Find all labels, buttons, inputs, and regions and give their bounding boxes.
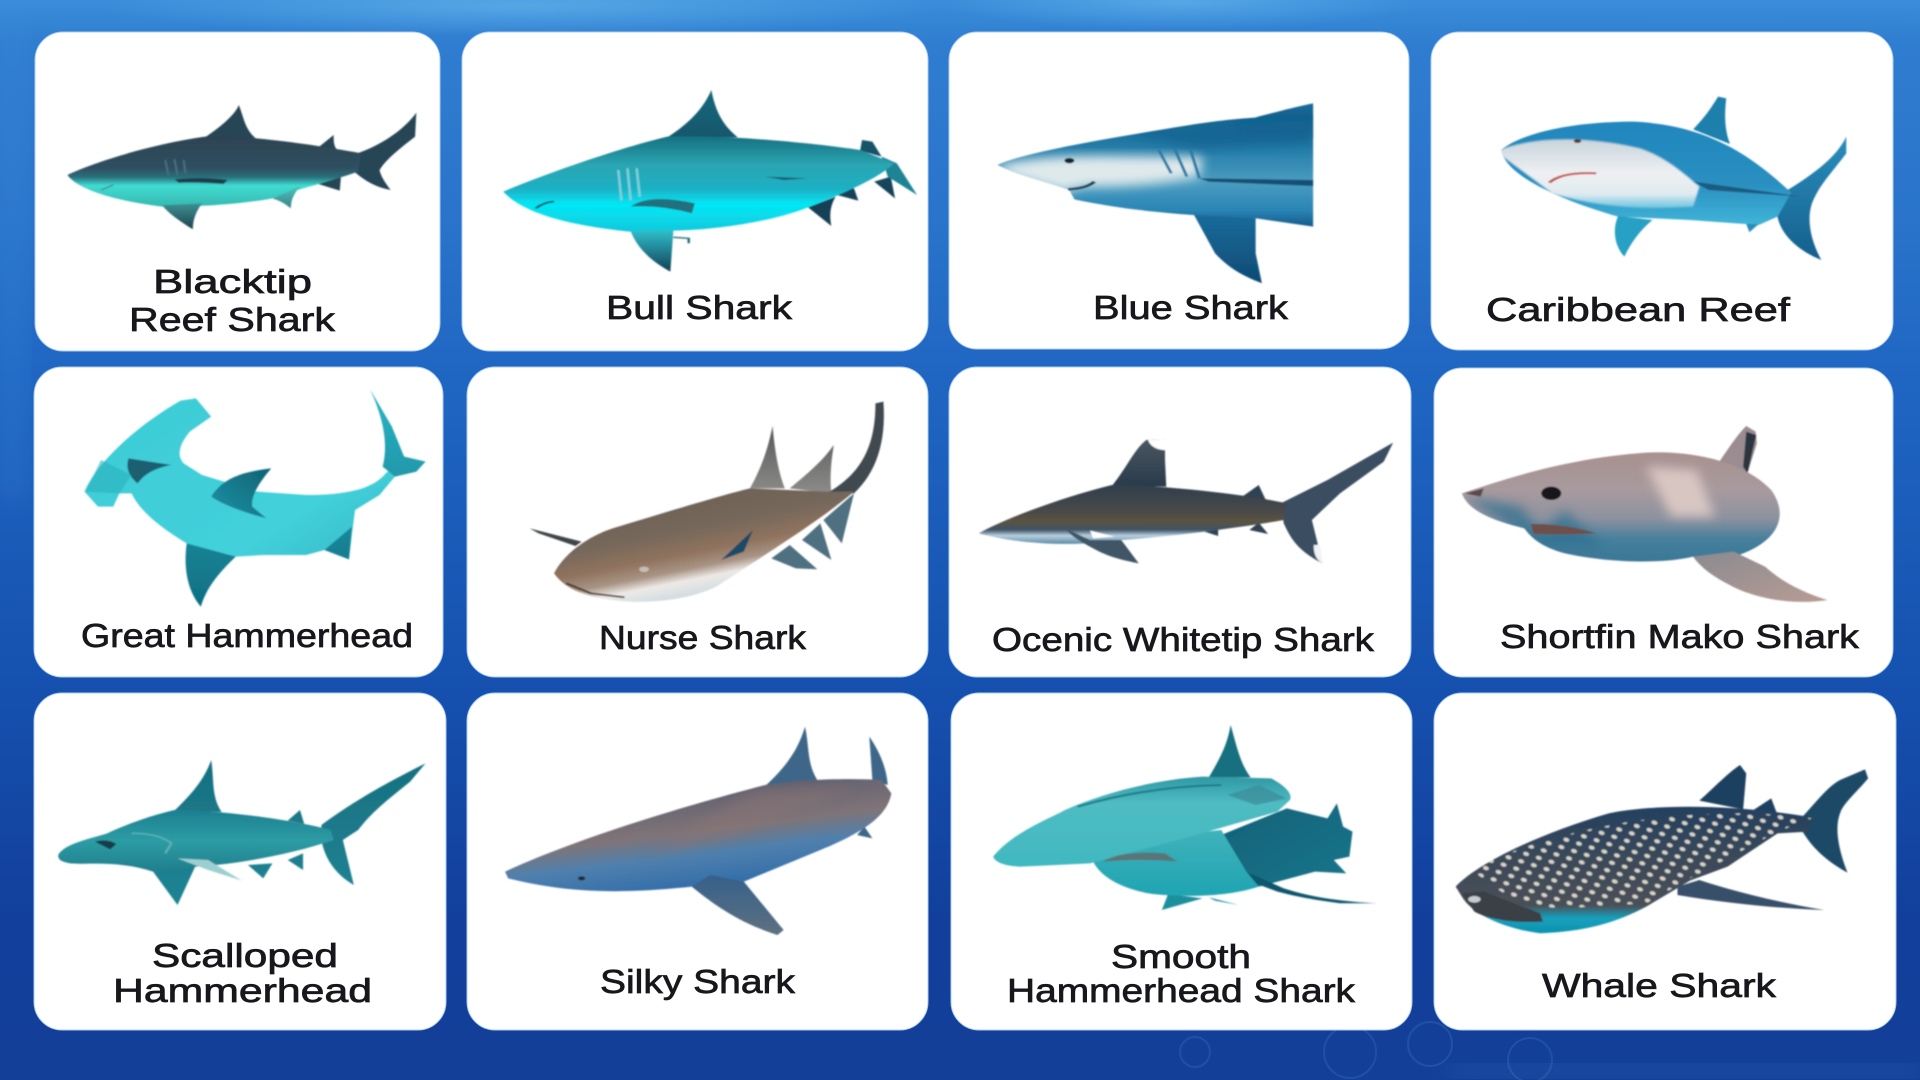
panel: Scalloped Hammerhead — [34, 693, 446, 1030]
label: Nurse Shark: Nurse Shark — [599, 619, 807, 656]
icon: scalloped hammerhead shark — [58, 760, 425, 905]
icon: blue shark — [996, 103, 1313, 283]
icon: whale shark — [1456, 765, 1868, 933]
icon: caribbean reef shark — [1496, 97, 1846, 260]
label: Scalloped Hammerhead — [113, 937, 372, 1009]
panel: Silky Shark — [467, 693, 928, 1030]
label: Blacktip Reef Shark — [129, 263, 336, 338]
icon: great hammerhead shark — [84, 390, 425, 607]
panel: Nurse Shark — [467, 367, 928, 677]
label: Silky Shark: Silky Shark — [600, 963, 796, 1000]
label: Scalloped Hammerhead: Scalloped — [152, 937, 338, 974]
label: Blacktip Reef Shark: Reef Shark — [129, 301, 336, 338]
label: Ocenic Whitetip Shark: Ocenic Whitetip Shark — [992, 621, 1375, 658]
icon: silky shark — [505, 727, 891, 935]
label: Scalloped Hammerhead: Hammerhead — [113, 972, 372, 1009]
panel: Smooth Hammerhead Shark — [951, 693, 1412, 1030]
panel: Caribbean Reef — [1431, 32, 1893, 350]
icon: smooth hammerhead shark — [993, 725, 1378, 910]
label: Smooth Hammerhead Shark: Smooth — [1111, 938, 1251, 975]
icon: shortfin mako shark — [1462, 426, 1828, 602]
label: Smooth Hammerhead Shark: Hammerhead Shark — [1007, 972, 1356, 1009]
icon: nurse shark — [530, 402, 884, 602]
icon: blacktip reef shark — [67, 105, 416, 229]
label: Blacktip Reef Shark: Blacktip — [153, 263, 312, 300]
label: Bull Shark: Bull Shark — [606, 289, 793, 326]
panel: Great Hammerhead — [34, 367, 443, 677]
label: Caribbean Reef: Caribbean Reef — [1486, 291, 1791, 328]
icon: bull shark — [503, 90, 917, 272]
label: Great Hammerhead: Great Hammerhead — [81, 617, 413, 654]
panel: Bull Shark — [462, 32, 928, 351]
label: Shortfin Mako Shark: Shortfin Mako Shark — [1500, 618, 1860, 655]
label: Smooth Hammerhead Shark — [1007, 938, 1356, 1009]
label: Whale Shark: Whale Shark — [1542, 967, 1777, 1004]
label: Blue Shark: Blue Shark — [1093, 289, 1289, 326]
icon: oceanic whitetip shark — [979, 439, 1393, 563]
panel: Ocenic Whitetip Shark — [949, 367, 1411, 677]
panel: Whale Shark — [1434, 693, 1896, 1030]
panel: Shortfin Mako Shark — [1434, 368, 1893, 677]
panel: Blue Shark — [949, 32, 1409, 349]
panel: Blacktip Reef Shark — [35, 32, 440, 351]
